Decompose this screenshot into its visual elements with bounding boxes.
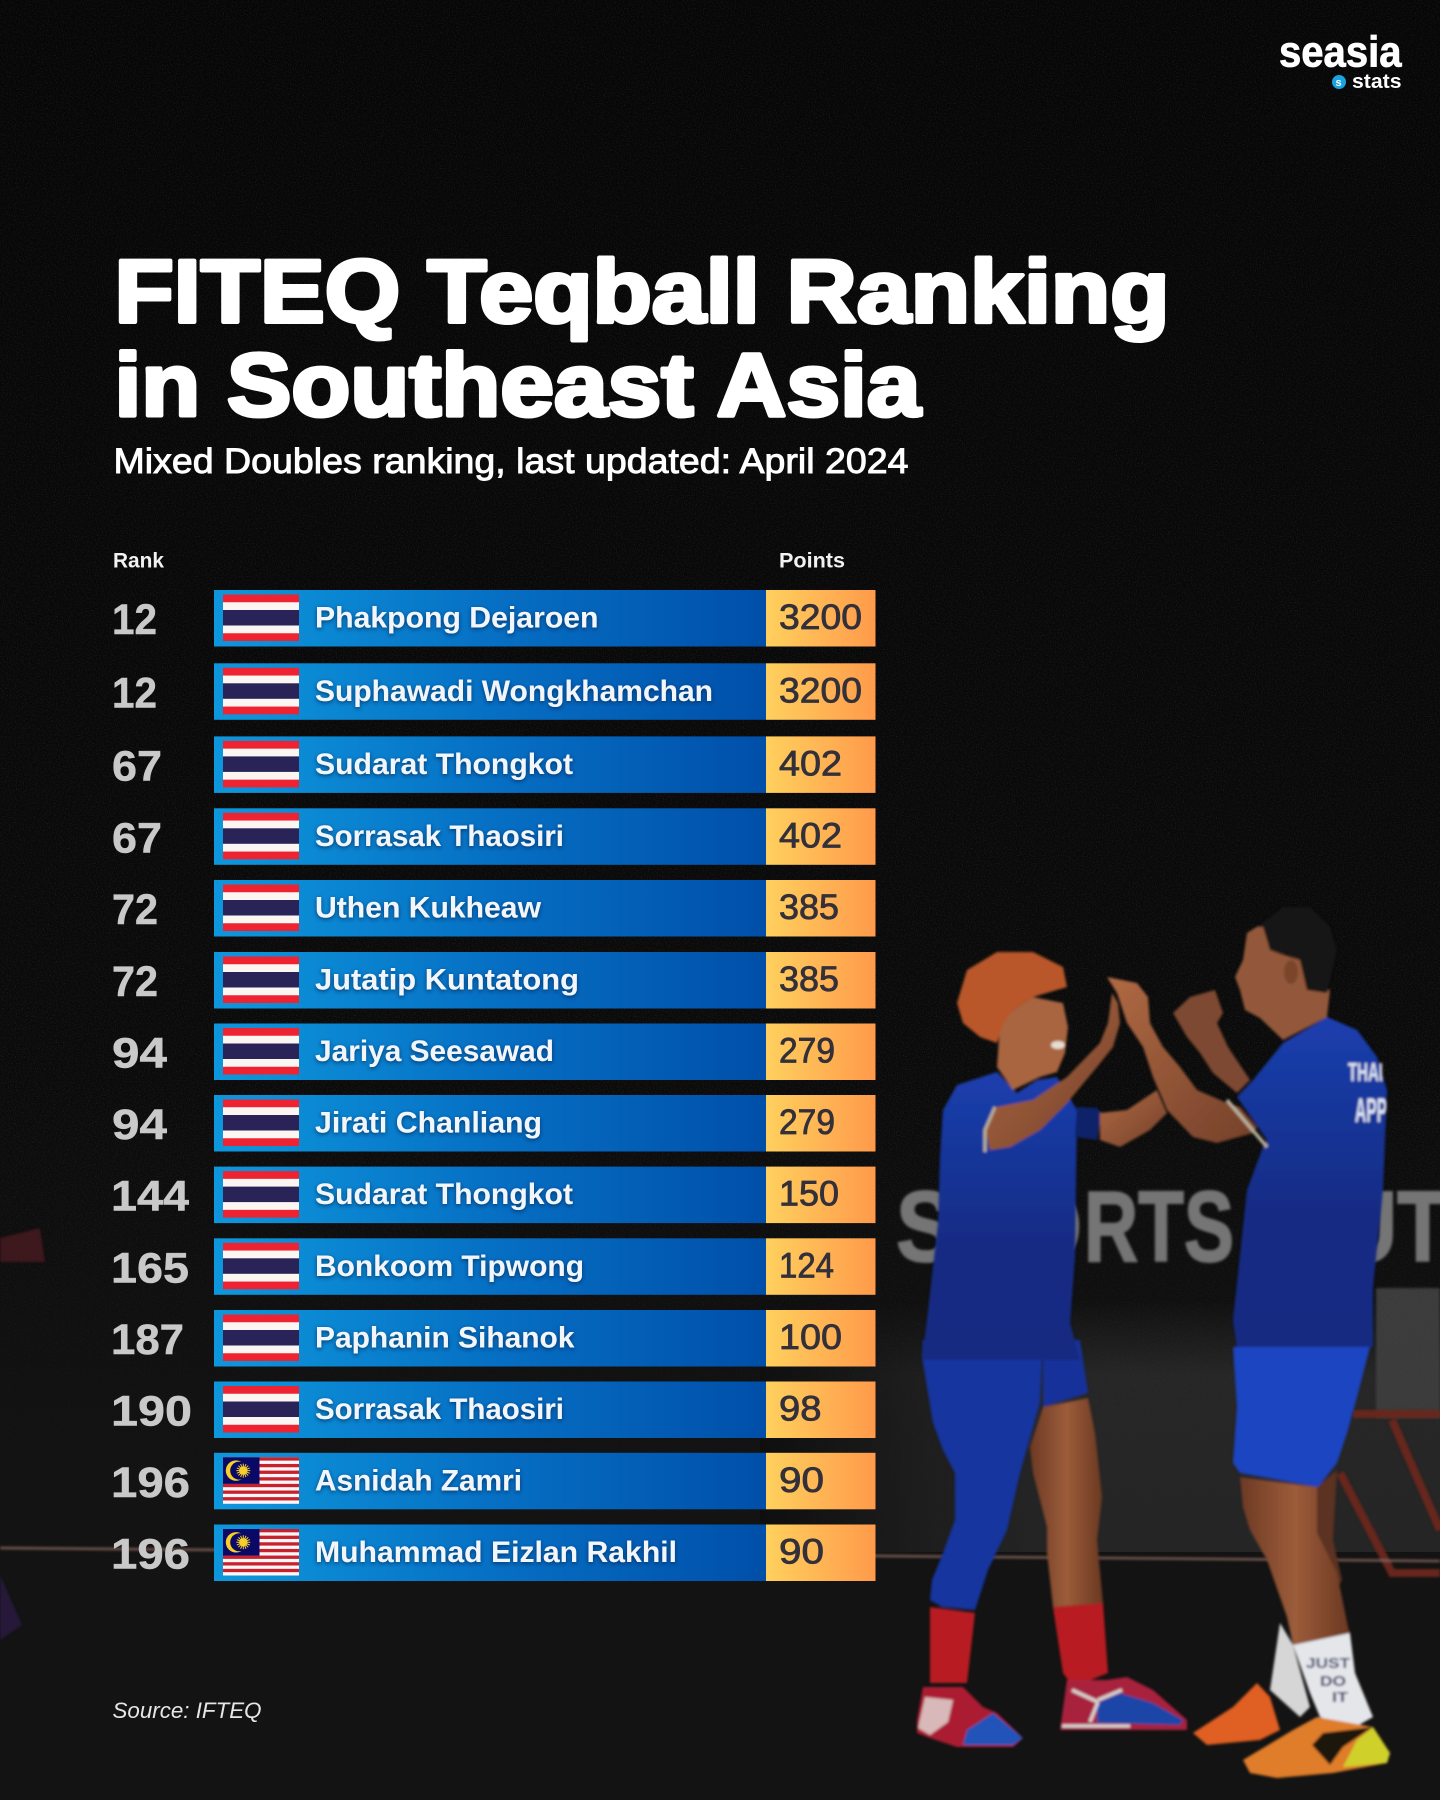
row: rank 12 Phakpong Dejaroen: 3200 bbox=[779, 598, 862, 637]
row: rank 72 Uthen Kukheaw: 72 bbox=[112, 886, 158, 934]
points column heading: Points bbox=[779, 550, 845, 572]
row: rank 67 Sudarat Thongkot: 67 bbox=[112, 742, 162, 790]
logo: seasia stats: seasia bbox=[1279, 28, 1402, 77]
row: rank 94 Jariya Seesawad: 94 bbox=[112, 1030, 167, 1078]
floor line and table frame bbox=[0, 1228, 1440, 1640]
row: rank 196 Asnidah Zamri: 196 bbox=[111, 1459, 190, 1507]
row: rank 187 Paphanin Sihanok: 100 bbox=[779, 1318, 842, 1357]
row: rank 67 Sorrasak Thaosiri: 402 bbox=[779, 816, 842, 855]
title: in Southeast Asia bbox=[114, 334, 922, 434]
photo: man player: JUST bbox=[1306, 1655, 1350, 1672]
rank column heading: Rank bbox=[113, 550, 164, 572]
row: rank 67 Sudarat Thongkot bbox=[112, 736, 876, 793]
row: rank 187 Paphanin Sihanok: Paphanin Sihanok bbox=[315, 1322, 575, 1354]
title: FITEQ Teqball Ranking bbox=[114, 241, 1170, 341]
row: rank 144 Sudarat Thongkot: 144 bbox=[111, 1173, 189, 1221]
row: rank 67 Sorrasak Thaosiri bbox=[112, 808, 876, 865]
row: rank 12 Phakpong Dejaroen: 12 bbox=[112, 596, 157, 644]
row: rank 72 Jutatip Kuntatong: 385 bbox=[779, 960, 839, 999]
row: rank 72 Jutatip Kuntatong bbox=[112, 952, 876, 1008]
row: rank 190 Sorrasak Thaosiri: 190 bbox=[111, 1388, 192, 1436]
row: rank 196 Asnidah Zamri: 90 bbox=[779, 1461, 824, 1500]
photo: man player: APP bbox=[1355, 1092, 1387, 1130]
row: rank 67 Sorrasak Thaosiri: Sorrasak Thaosiri bbox=[315, 820, 564, 853]
backdrop banner text: SPO bbox=[896, 1171, 1082, 1283]
row: rank 187 Paphanin Sihanok: 187 bbox=[111, 1316, 184, 1364]
row: rank 144 Sudarat Thongkot bbox=[111, 1167, 876, 1223]
row: rank 190 Sorrasak Thaosiri: 98 bbox=[779, 1390, 822, 1428]
logo: seasia stats: stats bbox=[1352, 71, 1402, 93]
photo: man player: IT bbox=[1332, 1689, 1348, 1706]
row: rank 94 Jirati Chanliang: 94 bbox=[112, 1101, 167, 1149]
subtitle: Mixed Doubles ranking, last updated: April 2024 bbox=[114, 442, 908, 481]
row: rank 12 Phakpong Dejaroen bbox=[112, 590, 876, 646]
row: rank 190 Sorrasak Thaosiri: Sorrasak Thaosiri bbox=[315, 1393, 564, 1426]
row: rank 72 Uthen Kukheaw: Uthen Kukheaw bbox=[315, 892, 542, 924]
row: rank 196 Muhammad Eizlan Rakhil bbox=[111, 1524, 876, 1581]
photo: man player bbox=[1107, 907, 1390, 1778]
row: rank 94 Jirati Chanliang: Jirati Chanliang bbox=[315, 1106, 542, 1140]
row: rank 94 Jariya Seesawad: 279 bbox=[779, 1032, 835, 1070]
row: rank 196 Muhammad Eizlan Rakhil: Muhammad Eizlan Rakhil bbox=[315, 1536, 677, 1569]
row: rank 165 Bonkoom Tipwong bbox=[111, 1238, 876, 1295]
backdrop banner text: RTS bbox=[1084, 1171, 1234, 1283]
row: rank 67 Sudarat Thongkot: 402 bbox=[779, 744, 842, 783]
row: rank 196 Muhammad Eizlan Rakhil: 196 bbox=[111, 1530, 190, 1578]
row: rank 196 Muhammad Eizlan Rakhil: 90 bbox=[779, 1532, 824, 1572]
row: rank 12 Suphawadi Wongkhamchan: 12 bbox=[112, 669, 157, 717]
row: rank 67 Sorrasak Thaosiri: 67 bbox=[112, 814, 162, 862]
row: rank 165 Bonkoom Tipwong: Bonkoom Tipwong bbox=[315, 1250, 584, 1283]
photo: woman player bbox=[917, 952, 1187, 1747]
row: rank 196 Asnidah Zamri: Asnidah Zamri bbox=[315, 1464, 522, 1497]
source note: Source: IFTEQ bbox=[112, 1698, 262, 1723]
row: rank 94 Jariya Seesawad bbox=[112, 1024, 876, 1080]
row: rank 72 Uthen Kukheaw bbox=[112, 880, 876, 936]
row: rank 187 Paphanin Sihanok bbox=[111, 1310, 876, 1366]
row: rank 94 Jirati Chanliang: 279 bbox=[779, 1103, 835, 1142]
row: rank 165 Bonkoom Tipwong: 165 bbox=[111, 1244, 189, 1292]
row: rank 72 Jutatip Kuntatong: Jutatip Kuntatong bbox=[315, 964, 579, 996]
row: rank 72 Uthen Kukheaw: 385 bbox=[779, 888, 839, 927]
title bbox=[114, 241, 1170, 434]
photo: man player: THAI bbox=[1348, 1057, 1383, 1087]
row: rank 165 Bonkoom Tipwong: 124 bbox=[779, 1246, 834, 1285]
logo: seasia stats: s bbox=[1336, 77, 1342, 89]
row: rank 196 Asnidah Zamri bbox=[111, 1453, 876, 1509]
row: rank 12 Suphawadi Wongkhamchan bbox=[112, 663, 876, 720]
row: rank 94 Jariya Seesawad: Jariya Seesawad bbox=[315, 1035, 554, 1068]
row: rank 144 Sudarat Thongkot: 150 bbox=[779, 1175, 839, 1214]
row: rank 144 Sudarat Thongkot: Sudarat Thongkot bbox=[315, 1178, 573, 1211]
row: rank 12 Suphawadi Wongkhamchan: Suphawadi Wongkhamchan bbox=[315, 675, 713, 708]
row: rank 190 Sorrasak Thaosiri bbox=[111, 1382, 876, 1438]
row: rank 94 Jirati Chanliang bbox=[112, 1095, 876, 1152]
row: rank 72 Jutatip Kuntatong: 72 bbox=[112, 958, 158, 1006]
photo: man player: DO bbox=[1320, 1673, 1346, 1690]
row: rank 12 Suphawadi Wongkhamchan: 3200 bbox=[779, 671, 862, 710]
row: rank 12 Phakpong Dejaroen: Phakpong Dejaroen bbox=[315, 602, 598, 634]
row: rank 67 Sudarat Thongkot: Sudarat Thongkot bbox=[315, 748, 573, 781]
backdrop banner text bbox=[896, 1171, 1440, 1283]
